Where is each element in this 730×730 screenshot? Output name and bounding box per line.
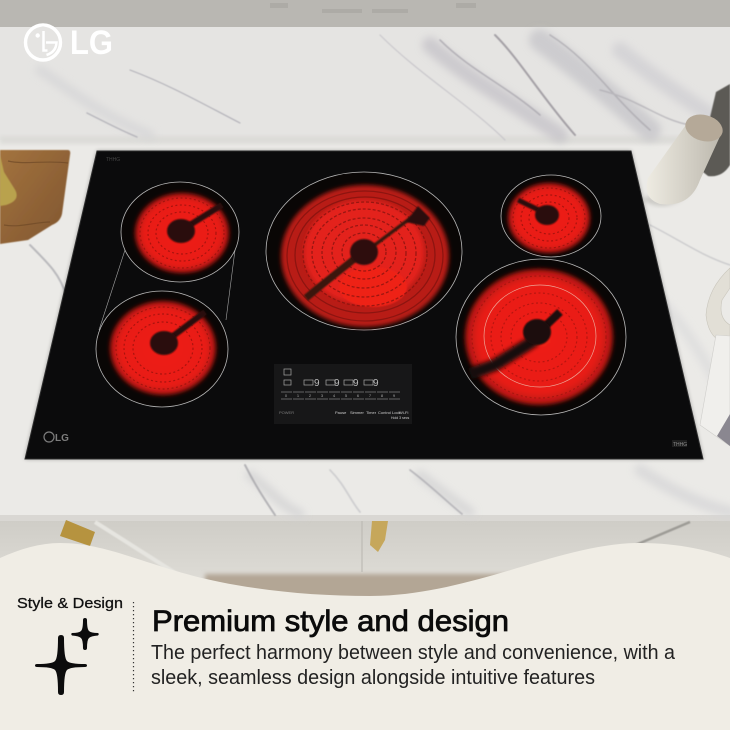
control panel: Control Lock — [378, 410, 400, 415]
control panel: Timer — [366, 410, 377, 415]
heading: Premium style and design — [152, 605, 509, 638]
burner: center large — [266, 172, 462, 330]
control panel: 7 — [369, 393, 372, 398]
LG logo — [26, 24, 113, 62]
towel and rail — [700, 268, 730, 446]
marble veins — [30, 35, 730, 515]
model badge: THHG — [673, 442, 687, 448]
model badge — [672, 440, 687, 448]
dotted divider — [132, 602, 134, 692]
salt shaker dark — [698, 84, 730, 176]
control panel: 1 — [297, 393, 300, 398]
description text: The perfect harmony between style and convenience, with a — [151, 642, 676, 664]
burner: front right — [456, 259, 626, 415]
control panel: 0 — [285, 393, 288, 398]
control panel: 2 — [309, 393, 312, 398]
salt shaker white — [645, 111, 726, 204]
burner: back right — [501, 175, 601, 257]
bottom caption panel — [0, 543, 730, 730]
control panel: 4 — [333, 393, 336, 398]
glass jar — [0, 155, 17, 206]
control panel: 6 — [357, 393, 360, 398]
cabinet handles and lines — [60, 520, 690, 576]
cooktop — [25, 151, 703, 459]
burner: back left — [121, 182, 239, 282]
control panel: Wi-Fi — [399, 410, 408, 415]
control panel: 8 — [381, 393, 384, 398]
cooktop brand mark — [44, 432, 69, 444]
LG logo: LG — [70, 24, 113, 62]
control panel: Hold 3 secs — [391, 416, 410, 420]
control panel: 9 — [334, 378, 340, 389]
control panel: Simmer — [350, 410, 364, 415]
control panel: 5 — [345, 393, 348, 398]
icon: sparkles — [35, 618, 99, 695]
description text — [151, 642, 676, 689]
top badge: THHG — [106, 157, 120, 163]
control panel: POWER — [279, 410, 294, 415]
cooktop brand mark: LG — [55, 433, 69, 444]
control panel: Pause — [335, 410, 347, 415]
control panel: 9 — [393, 393, 396, 398]
cutting board — [0, 150, 70, 244]
control panel: 3 — [321, 393, 324, 398]
description text: sleek, seamless design alongside intuitive features — [151, 667, 595, 689]
control panel: 9 — [373, 378, 379, 389]
category label: Style & Design — [17, 595, 123, 612]
burner: front left — [96, 291, 228, 407]
bridge element outline — [99, 250, 235, 330]
control panel: 9 — [353, 378, 359, 389]
control panel — [274, 364, 412, 424]
control panel: 9 — [314, 378, 320, 389]
